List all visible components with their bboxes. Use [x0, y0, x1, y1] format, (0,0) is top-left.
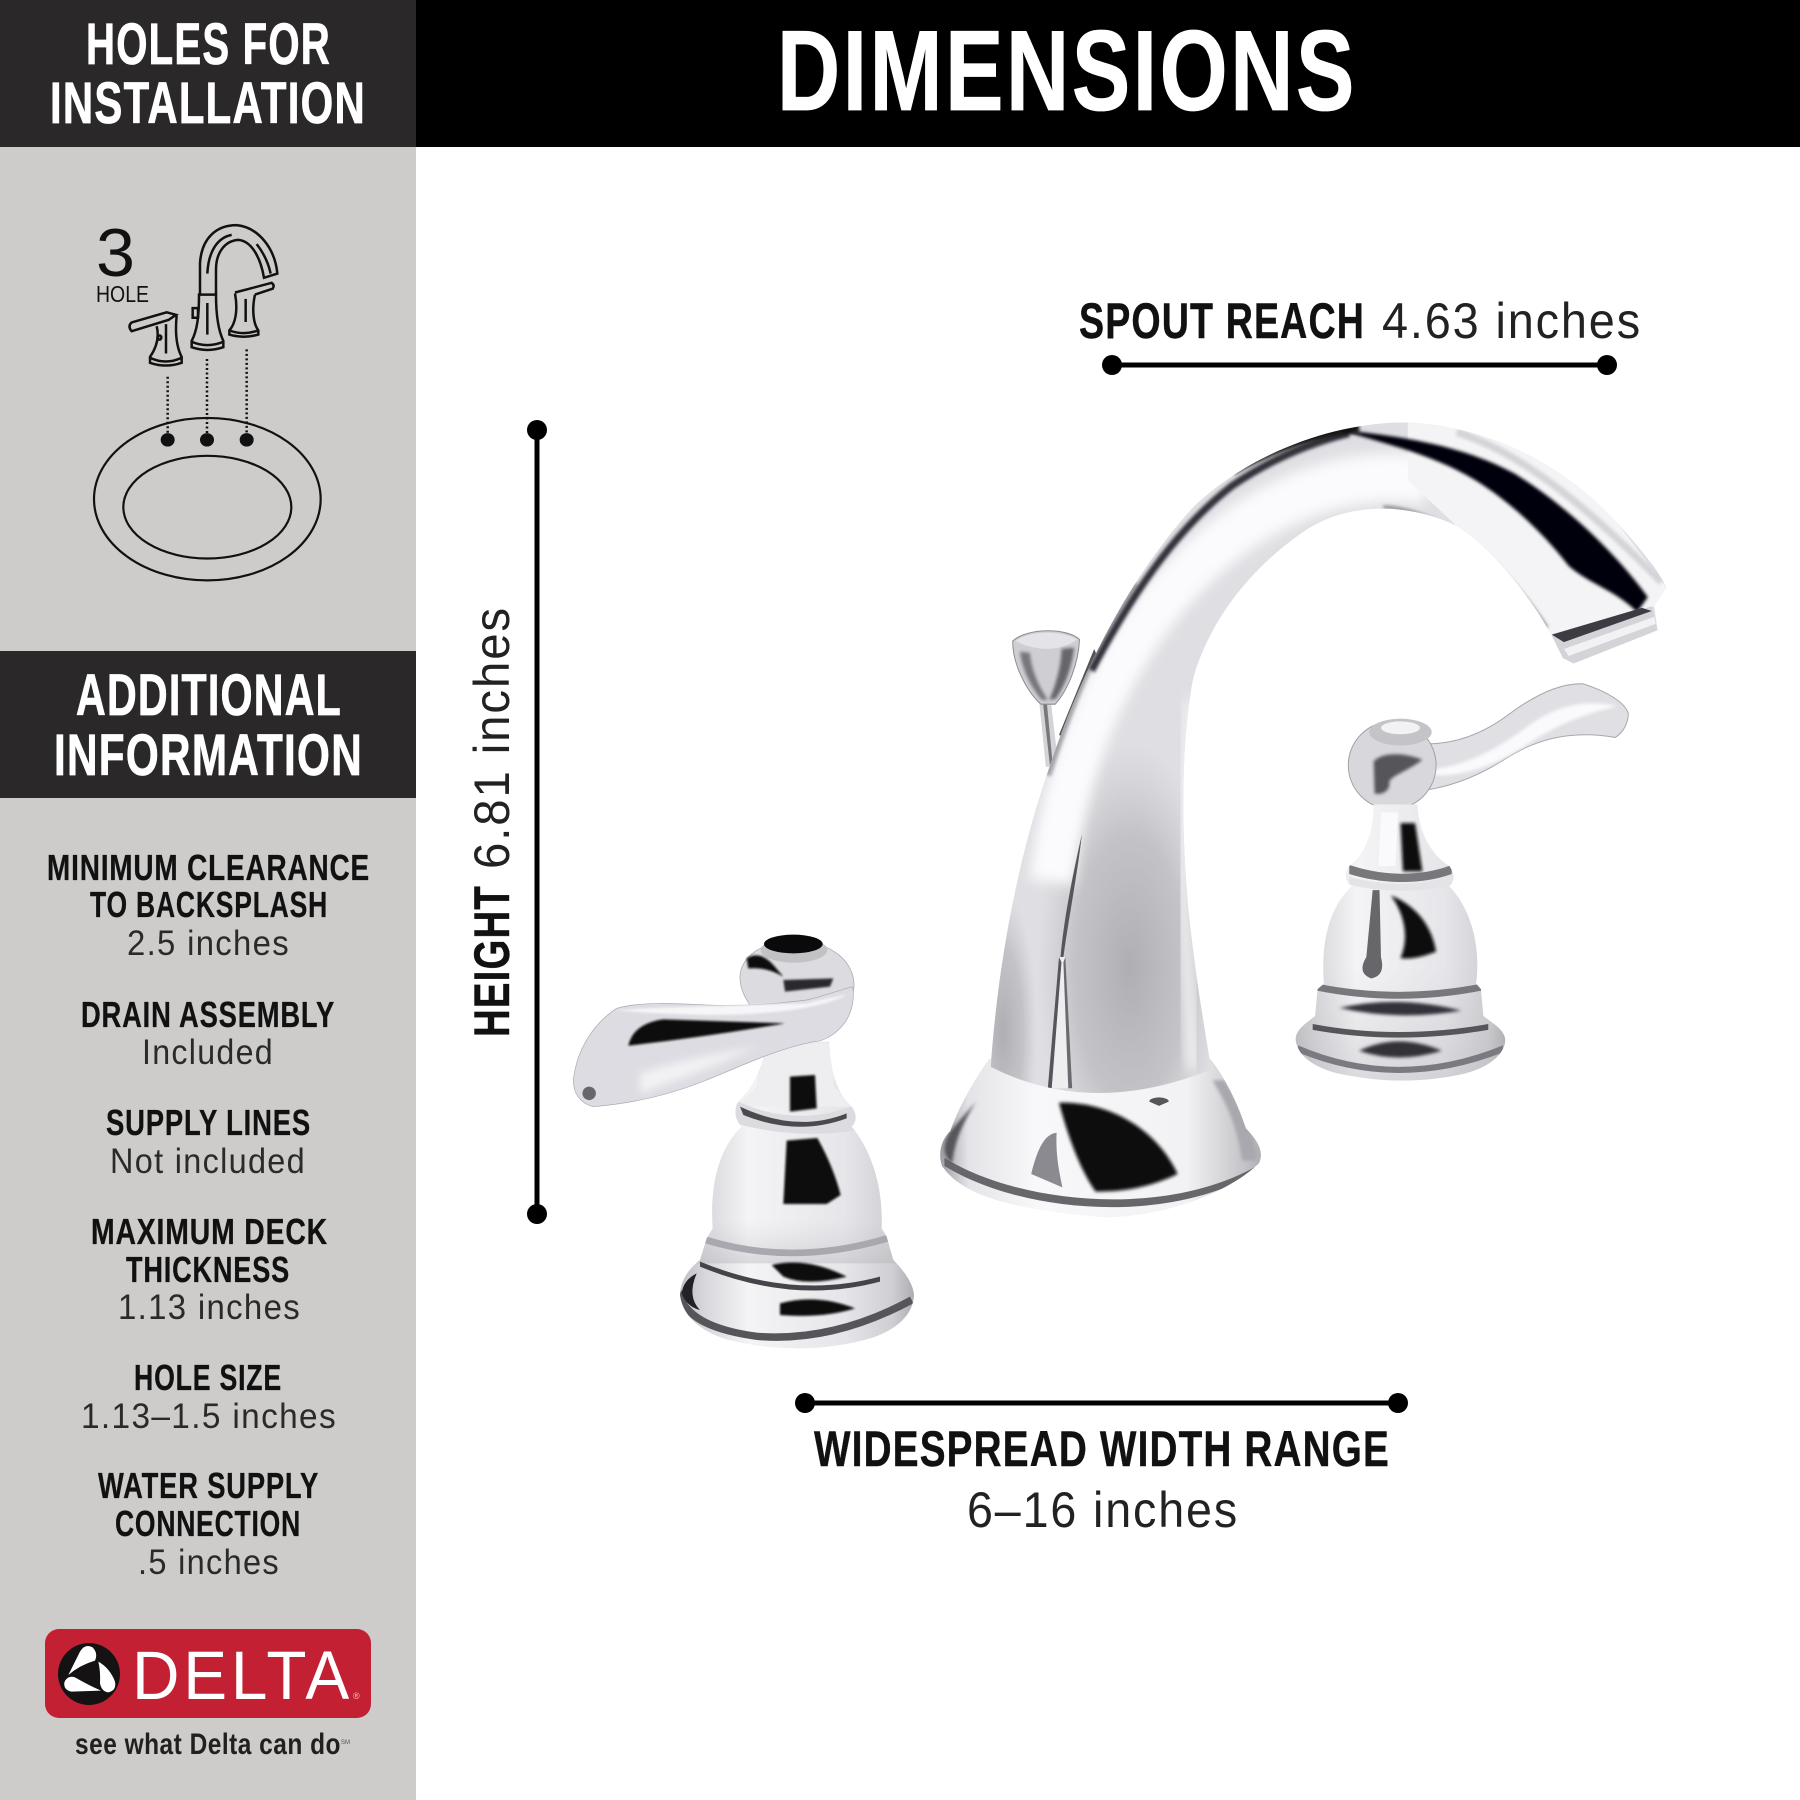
text block: minimum clearance [47, 847, 370, 963]
icon: left handle [129, 312, 182, 366]
text block: hole size: HOLE SIZE [134, 1357, 282, 1398]
heading: additional information [0, 651, 416, 798]
text block: maximum deck thickness: THICKNESS [126, 1249, 290, 1290]
text block: drain assembly: Included [142, 1033, 274, 1072]
text block: maximum deck thickness: 1.13 inches [118, 1288, 301, 1327]
logo: delta: DELTA [132, 1637, 353, 1714]
icon: dotted guide lines [168, 349, 247, 434]
label: 3 hole: HOLE [96, 281, 149, 307]
text block: supply lines [106, 1102, 311, 1181]
text block: water supply connection: .5 inches [138, 1543, 280, 1582]
dimension: spout reach [1079, 293, 1642, 375]
text block: hole size: 1.13–1.5 inches [81, 1397, 337, 1436]
text block: maximum deck thickness [91, 1211, 328, 1327]
dimension: height [464, 420, 547, 1224]
text block: minimum clearance: 2.5 inches [127, 924, 290, 963]
head and cap [740, 935, 854, 1043]
text block: water supply connection: CONNECTION [115, 1503, 301, 1544]
text block: supply lines: SUPPLY LINES [106, 1102, 311, 1143]
right handle [1291, 684, 1628, 1091]
faucet: centre spout, pop-up and right handle [935, 400, 1691, 1225]
text block: minimum clearance: MINIMUM CLEARANCE [47, 847, 370, 888]
text block: hole size [81, 1357, 337, 1436]
heading: holes for installation: INSTALLATION [50, 71, 366, 136]
spout and neck [990, 422, 1666, 1093]
heading: holes for installation: HOLES FOR [86, 12, 331, 77]
lever [573, 987, 853, 1107]
pop-up rod [1013, 631, 1097, 767]
text block: drain assembly: DRAIN ASSEMBLY [81, 994, 335, 1035]
dimension: height: HEIGHT [464, 885, 520, 1037]
dimension: height: 6.81 inches [464, 606, 520, 869]
dimension: widespread width range: 6–16 inches [967, 1482, 1239, 1538]
icon: right handle [229, 283, 274, 337]
heading: holes for installation [0, 0, 416, 147]
icon: sink outline [94, 418, 321, 580]
icon: delta triangle petals [64, 1646, 115, 1692]
icon: three holes [161, 433, 254, 447]
label: 3 hole [96, 215, 149, 307]
text block: drain assembly [81, 994, 335, 1072]
dimension: spout reach: SPOUT REACH [1079, 293, 1365, 349]
text block: supply lines: Not included [110, 1142, 306, 1181]
faucet: left handle [573, 935, 917, 1360]
dimension: widespread width range [795, 1393, 1408, 1538]
heading: additional information: INFORMATION [54, 723, 363, 788]
icon: 3 hole faucet and sink diagram [94, 215, 321, 580]
label: 3 hole: 3 [96, 215, 135, 291]
text block: water supply connection: WATER SUPPLY [98, 1465, 319, 1506]
body [677, 1040, 917, 1360]
logo: delta: see what Delta can do [75, 1728, 341, 1761]
heading: additional information: ADDITIONAL [76, 663, 342, 728]
dimension: widespread width range: WIDESPREAD WIDTH RANGE [814, 1421, 1390, 1477]
dimension: spout reach: 4.63 inches [1382, 293, 1642, 349]
title: DIMENSIONS [777, 8, 1357, 135]
logo: delta: ® [353, 1691, 360, 1701]
panel: sidebar background [0, 147, 416, 1800]
logo: delta: SM [341, 1740, 350, 1746]
spout base dome [940, 1059, 1261, 1217]
icon: centre spout [192, 225, 277, 350]
title bar: dimensions [416, 0, 1800, 147]
text block: water supply connection [98, 1465, 319, 1582]
text block: minimum clearance: TO BACKSPLASH [90, 884, 328, 925]
text block: maximum deck thickness: MAXIMUM DECK [91, 1211, 328, 1252]
logo: delta [45, 1629, 371, 1761]
